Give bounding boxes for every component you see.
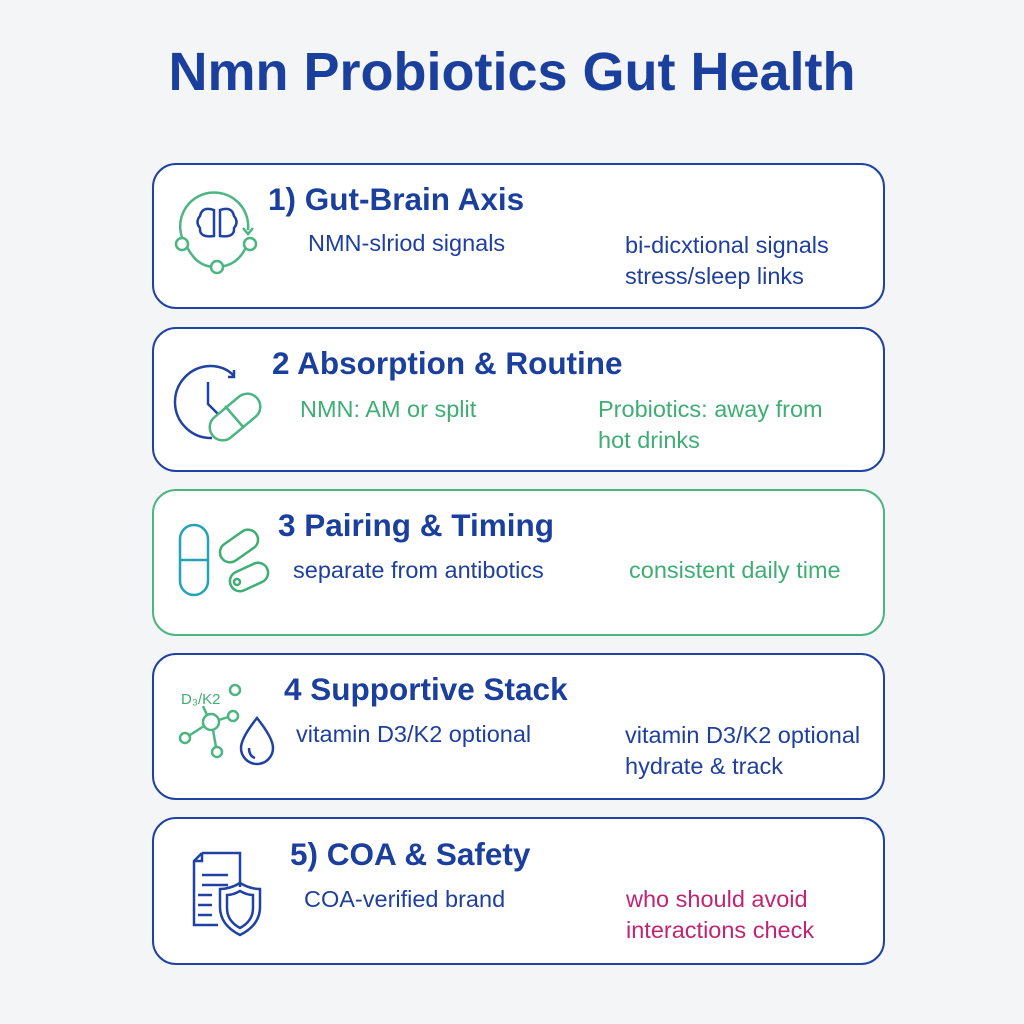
text: interactions check xyxy=(626,917,814,943)
panel: absorption xyxy=(152,327,885,472)
text: separate from antibotics xyxy=(293,557,544,583)
text: hot drinks xyxy=(598,427,700,453)
panel: pairing xyxy=(152,489,885,636)
panel: gut-brain axis xyxy=(152,163,885,309)
heading 4: 4 Supportive Stack xyxy=(284,671,568,707)
text: vitamin D3/K2 optional xyxy=(625,722,860,748)
text: consistent daily time xyxy=(629,557,841,583)
heading 3: 3 Pairing & Timing xyxy=(278,507,554,543)
text: vitamin D3/K2 optional xyxy=(296,721,531,747)
icon: brain cycle xyxy=(174,191,258,274)
text: hydrate & track xyxy=(625,753,783,779)
panel: COA safety xyxy=(152,817,885,965)
text: COA-verified brand xyxy=(304,886,505,912)
text: NMN: AM or split xyxy=(300,396,476,422)
text: Probiotics: away from xyxy=(598,396,823,422)
icon: capsule bacteria xyxy=(178,524,270,596)
text: stress/sleep links xyxy=(625,263,804,289)
text xyxy=(625,722,860,779)
text xyxy=(626,886,814,943)
text: who should avoid xyxy=(626,886,808,912)
icon: clock pill xyxy=(174,364,262,442)
text: NMN-slriod signals xyxy=(308,230,505,256)
heading 1: 1) Gut-Brain Axis xyxy=(268,181,524,217)
title: Nmn Probiotics Gut Health xyxy=(168,42,856,102)
heading 5: 5) COA & Safety xyxy=(290,836,530,872)
text xyxy=(625,232,829,289)
icon: molecule drop xyxy=(178,684,274,766)
text: bi-dicxtional signals xyxy=(625,232,829,258)
panel: supportive stack xyxy=(152,653,885,800)
icon: molecule drop: D₃/K2 xyxy=(181,691,220,708)
heading 2: 2 Absorption & Routine xyxy=(272,345,623,381)
text xyxy=(598,396,823,453)
icon: document shield xyxy=(192,852,262,936)
